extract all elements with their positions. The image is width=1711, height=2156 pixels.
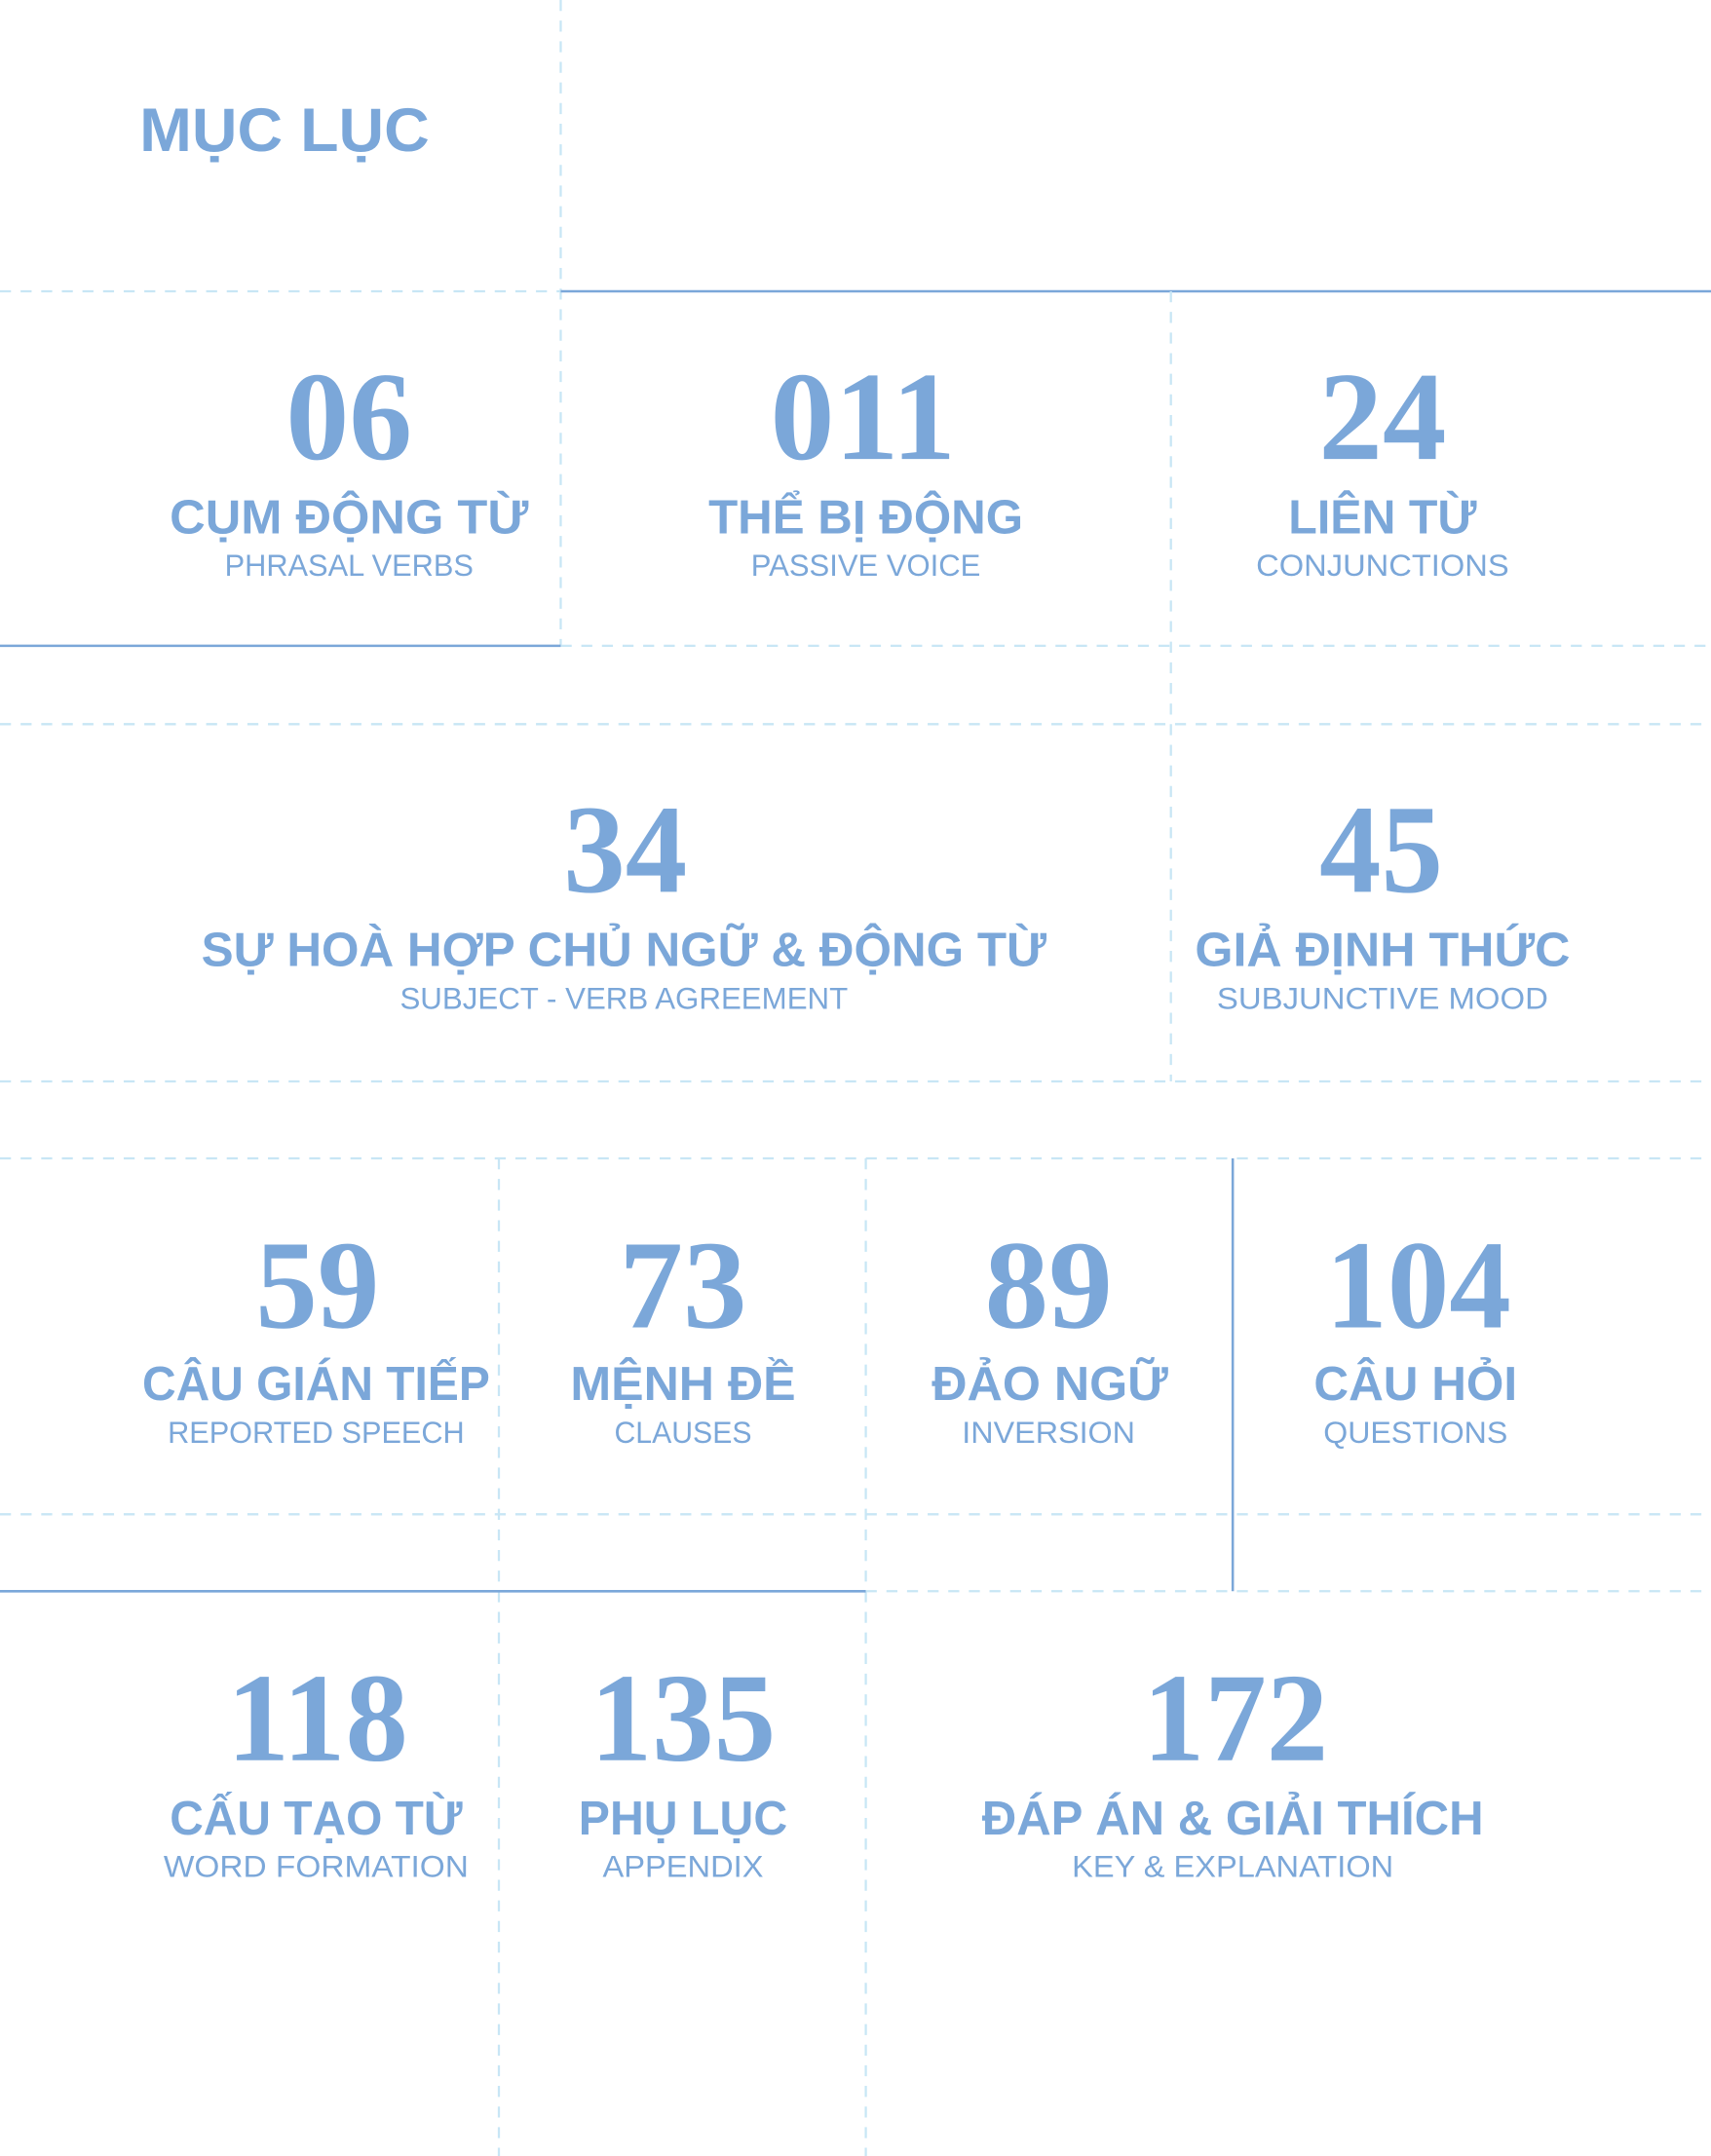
entry: conjunctions: LIÊN TỪ: [1288, 489, 1477, 544]
entry: phrasal verbs: CỤM ĐỘNG TỪ: [170, 488, 528, 544]
entry: passive voice: [708, 347, 1023, 583]
entry: questions: [1313, 1215, 1517, 1450]
entry: clauses: MỆNH ĐỀ: [570, 1356, 796, 1411]
entry: appendix: APPENDIX: [602, 1850, 764, 1884]
title: MỤC LỤC: [139, 96, 430, 165]
entry: appendix: 135: [590, 1648, 776, 1789]
entry: phrasal verbs: 06: [285, 347, 412, 487]
entry: subject-verb agreement: [202, 779, 1046, 1015]
entry: phrasal verbs: PHRASAL VERBS: [225, 548, 474, 583]
entry: key & explanation: ĐÁP ÁN & GIẢI THÍCH: [982, 1791, 1484, 1845]
entry: conjunctions: CONJUNCTIONS: [1256, 548, 1509, 583]
entry: reported speech: CÂU GIÁN TIẾP: [142, 1356, 490, 1411]
entry: conjunctions: 24: [1318, 347, 1446, 487]
entry: reported speech: [142, 1215, 490, 1450]
entry: word formation: [164, 1648, 469, 1884]
entry: conjunctions: [1256, 347, 1509, 583]
entry: subjunctive mood: [1195, 779, 1570, 1015]
entry: key & explanation: 172: [1143, 1648, 1328, 1789]
entry: word formation: WORD FORMATION: [164, 1850, 469, 1884]
entry: inversion: [932, 1215, 1168, 1450]
entry: appendix: PHỤ LỤC: [579, 1792, 787, 1845]
entry: subjunctive mood: GIẢ ĐỊNH THỨC: [1195, 923, 1570, 977]
entry: clauses: [570, 1215, 796, 1450]
entry: inversion: 89: [985, 1215, 1113, 1355]
entry: phrasal verbs: [170, 347, 528, 583]
entry: clauses: 73: [619, 1215, 747, 1355]
entry: word formation: 118: [227, 1648, 408, 1789]
entry: questions: QUESTIONS: [1323, 1416, 1507, 1450]
entry: subject-verb agreement: SỰ HOÀ HỢP CHỦ NGỮ & ĐỘNG TỪ: [202, 922, 1046, 977]
entry: clauses: CLAUSES: [614, 1416, 752, 1450]
entry: subjunctive mood: 45: [1319, 779, 1443, 920]
entry: reported speech: 59: [255, 1215, 379, 1355]
entry: questions: 104: [1325, 1215, 1511, 1355]
entry: inversion: ĐẢO NGỮ: [932, 1355, 1168, 1411]
entry: passive voice: PASSIVE VOICE: [751, 548, 980, 583]
entry: passive voice: THỂ BỊ ĐỘNG: [708, 488, 1023, 544]
entry: key & explanation: KEY & EXPLANATION: [1072, 1850, 1393, 1884]
entry: key & explanation: [982, 1648, 1484, 1884]
entry: questions: CÂU HỎI: [1313, 1355, 1517, 1411]
entry: inversion: INVERSION: [962, 1416, 1135, 1450]
entry: appendix: [579, 1648, 787, 1884]
entry: word formation: CẤU TẠO TỪ: [170, 1791, 463, 1845]
entry: subjunctive mood: SUBJUNCTIVE MOOD: [1217, 981, 1548, 1015]
entry: subject-verb agreement: 34: [563, 779, 687, 920]
entry: reported speech: REPORTED SPEECH: [168, 1416, 465, 1450]
entry: subject-verb agreement: SUBJECT - VERB AGREEMENT: [399, 981, 848, 1015]
entry: passive voice: 011: [771, 347, 956, 487]
